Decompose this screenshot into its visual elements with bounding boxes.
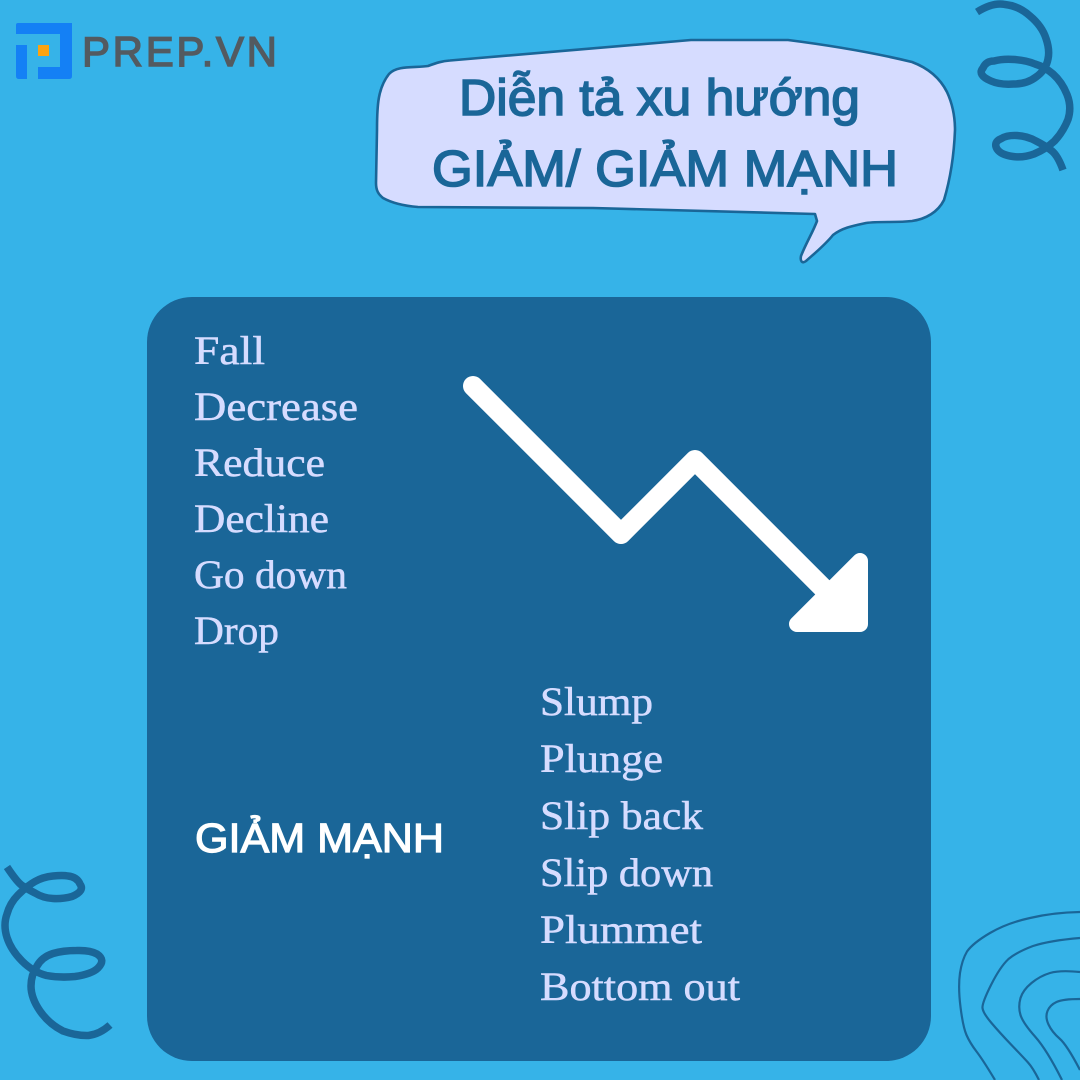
word list: plunging verbs: Slip down [540,850,713,895]
panel background [147,297,931,1061]
decorative contour lines: bottom right [959,912,1080,1080]
word list: falling verbs: Drop [194,608,279,653]
word list: falling verbs: Fall [194,328,265,373]
speech bubble title [376,40,955,262]
heading: GIẢM MẠNH: GIẢM MẠNH [195,815,444,861]
title line 2: GIẢM/ GIẢM MẠNH [432,139,898,197]
panel: vocabulary [147,297,931,1061]
decorative spiral: bottom left [5,867,110,1036]
word list: falling verbs [194,328,358,653]
arrow: downward trend [473,386,860,624]
word list: plunging verbs: Slip back [540,793,703,838]
word list: plunging verbs [540,679,740,1009]
logo wordmark: PREP.VN [82,28,277,75]
word list: falling verbs: Go down [194,552,347,597]
icon: logo mark [16,23,72,79]
word list: falling verbs: Decline [194,496,329,541]
title line 1: Diễn tả xu hướng [459,69,860,126]
word list: falling verbs: Reduce [194,440,325,485]
word list: falling verbs: Decrease [194,384,358,429]
word list: plunging verbs: Slump [540,679,653,724]
word list: plunging verbs: Bottom out [540,964,740,1009]
decorative spiral: top right [977,4,1070,170]
bubble shape [376,40,955,262]
logo: PREP.VN [16,23,277,79]
word list: plunging verbs: Plunge [540,736,663,781]
word list: plunging verbs: Plummet [540,907,702,952]
